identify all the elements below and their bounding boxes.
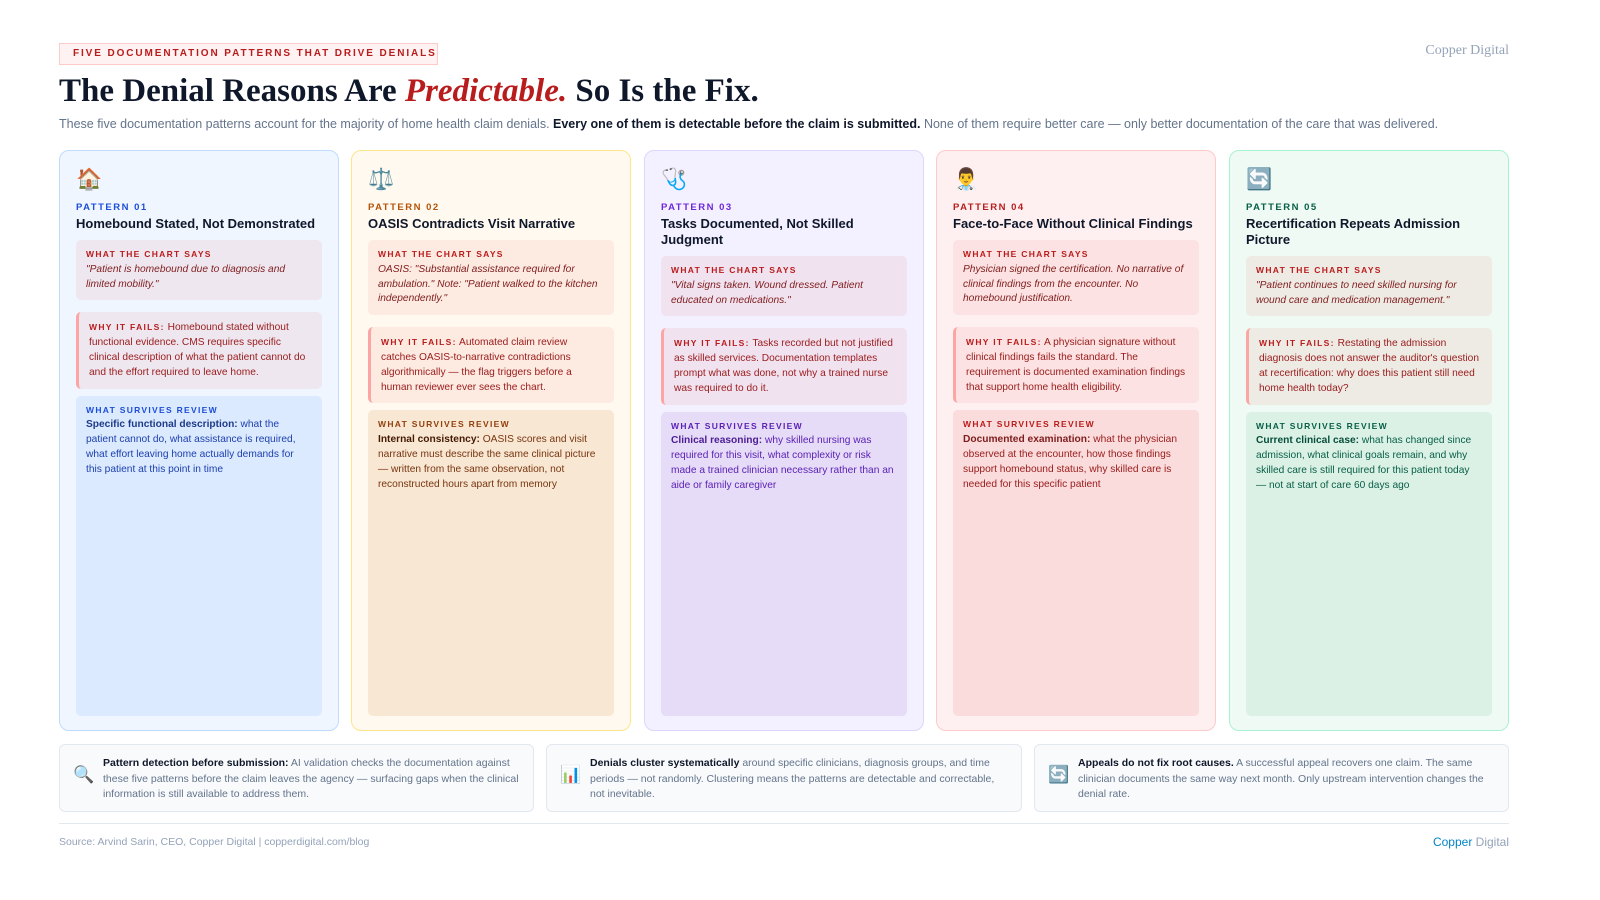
why it fails: WHY IT FAILS: Automated claim review catches OASIS-to-narrative contradictions algorithmically — the flag triggers before a human reviewer ever sees the chart. [381,337,572,393]
pattern label: PATTERN 03 [661,202,733,213]
pattern label: PATTERN 01 [76,202,148,213]
what survives review: WHAT SURVIVES REVIEW [671,421,803,431]
what the chart says: OASIS: "Substantial assistance required for ambulation." Note: "Patient walked to the kitchen independently." [378,264,598,304]
callout: appeals: Appeals do not fix root causes. A successful appeal recovers one claim. The same clinician documents the same way next month. Only upstream intervention changes the denial rate. [1078,757,1484,800]
icon: repeat arrows: 🔄 [1246,168,1272,191]
what the chart says: WHAT THE CHART SAYS [963,249,1089,259]
what survives review: WHAT SURVIVES REVIEW [378,419,510,429]
pattern label: PATTERN 04 [953,202,1025,213]
what survives review: Clinical reasoning: why skilled nursing was required for this visit, what complexity or risk made a trained clinician necessary rather than an aide or family caregiver [671,435,894,491]
what survives review: Specific functional description: what the patient cannot do, what assistance is required, what effort leaving home actually demands for this patient at this point in time [86,419,296,475]
what the chart says [1246,256,1492,316]
what survives review: Documented examination: what the physician observed at the encounter, how those findings support homebound status, why skilled care is needed for this specific patient [963,434,1177,490]
why it fails [76,312,322,389]
pattern title: OASIS Contradicts Visit Narrative [368,216,575,231]
what survives review [661,412,907,716]
what the chart says: Physician signed the certification. No narrative of clinical findings from the encounter. No homebound justification. [963,264,1183,304]
pattern label: PATTERN 05 [1246,202,1318,213]
icon: magnifier: 🔍 [73,765,94,784]
subtitle: These five documentation patterns account for the majority of home health claim denials. Every one of them is detectable before the claim is submitted. None of them require better care — only better documentation of the care that was delivered. [59,117,1438,131]
why it fails: WHY IT FAILS: Tasks recorded but not justified as skilled services. Documentation templates prompt what was done, not why a trained nurse was required to do it. [674,338,893,394]
panel: pattern 02 [351,150,631,731]
brand top right: Copper Digital [1425,43,1509,58]
what survives review [76,396,322,716]
brand footer: Copper Digital [1433,835,1509,849]
what survives review [1246,412,1492,716]
callout: pattern detection: Pattern detection before submission: AI validation checks the documentation against these five patterns before the claim leaves the agency — surfacing gaps when the clinical information is still available to address them. [103,757,519,800]
panel: pattern 04 [936,150,1216,731]
tag: section label: FIVE DOCUMENTATION PATTERNS THAT DRIVE DENIALS [73,48,437,59]
what survives review: WHAT SURVIVES REVIEW [86,405,218,415]
why it fails [953,327,1199,403]
what the chart says [661,256,907,316]
icon: bar chart: 📊 [560,765,581,784]
title: The Denial Reasons Are Predictable. So Is the Fix. [59,73,759,109]
callout: pattern detection [59,744,534,812]
icon: scales: ⚖️ [368,168,394,191]
pattern label: PATTERN 02 [368,202,440,213]
pattern title: Homebound Stated, Not Demonstrated [76,216,315,231]
what the chart says: "Patient is homebound due to diagnosis and limited mobility." [86,264,285,290]
what survives review: WHAT SURVIVES REVIEW [1256,421,1388,431]
source footer: Source: Arvind Sarin, CEO, Copper Digital | copperdigital.com/blog [59,836,369,848]
what the chart says [368,240,614,315]
panel: pattern 05 [1229,150,1509,731]
panel: pattern 03 [644,150,924,731]
why it fails [1246,328,1492,405]
icon: repeat: 🔄 [1048,765,1069,784]
pattern title: Tasks Documented, Not Skilled Judgment [661,216,854,247]
icon: stethoscope: 🩺 [661,168,687,191]
tag: section label [59,43,438,65]
callout: denials cluster [546,744,1022,812]
panel: pattern 01 [59,150,339,731]
what survives review: WHAT SURVIVES REVIEW [963,419,1095,429]
what the chart says: WHAT THE CHART SAYS [86,249,212,259]
what the chart says: WHAT THE CHART SAYS [378,249,504,259]
pattern title: Face-to-Face Without Clinical Findings [953,216,1193,231]
icon: physician: 👨‍⚕️ [953,168,979,191]
what the chart says: WHAT THE CHART SAYS [1256,265,1382,275]
why it fails: WHY IT FAILS: A physician signature without clinical findings fails the standard. The requirement is documented examination findings that support home health eligibility. [966,337,1185,393]
what the chart says: "Patient continues to need skilled nursing for wound care and medication management." [1256,280,1457,306]
why it fails [368,327,614,403]
what the chart says: WHAT THE CHART SAYS [671,265,797,275]
pattern title: Recertification Repeats Admission Picture [1246,216,1460,247]
what the chart says [953,240,1199,315]
icon: house: 🏠 [76,168,102,191]
why it fails: WHY IT FAILS: Restating the admission diagnosis does not answer the auditor's question at recertification: why does this patient still need home health today? [1259,338,1479,394]
why it fails [661,328,907,405]
what survives review [368,410,614,716]
what the chart says: "Vital signs taken. Wound dressed. Patient educated on medications." [671,280,863,306]
what survives review [953,410,1199,716]
what the chart says [76,240,322,300]
what survives review: Current clinical case: what has changed since admission, what clinical goals remain, and why skilled care is still required for this patient today — not at start of care 60 days ago [1256,435,1471,491]
callout: denials cluster: Denials cluster systematically around specific clinicians, diagnosis groups, and time periods — not randomly. Clustering means the patterns are detectable and correctable, not inevitable. [590,757,994,800]
callout: appeals [1034,744,1509,812]
what survives review: Internal consistency: OASIS scores and visit narrative must describe the same clinical picture — written from the same observation, not reconstructed hours apart from memory [378,434,595,490]
why it fails: WHY IT FAILS: Homebound stated without functional evidence. CMS requires specific clinical description of what the patient cannot do and the effort required to leave home. [89,322,305,378]
